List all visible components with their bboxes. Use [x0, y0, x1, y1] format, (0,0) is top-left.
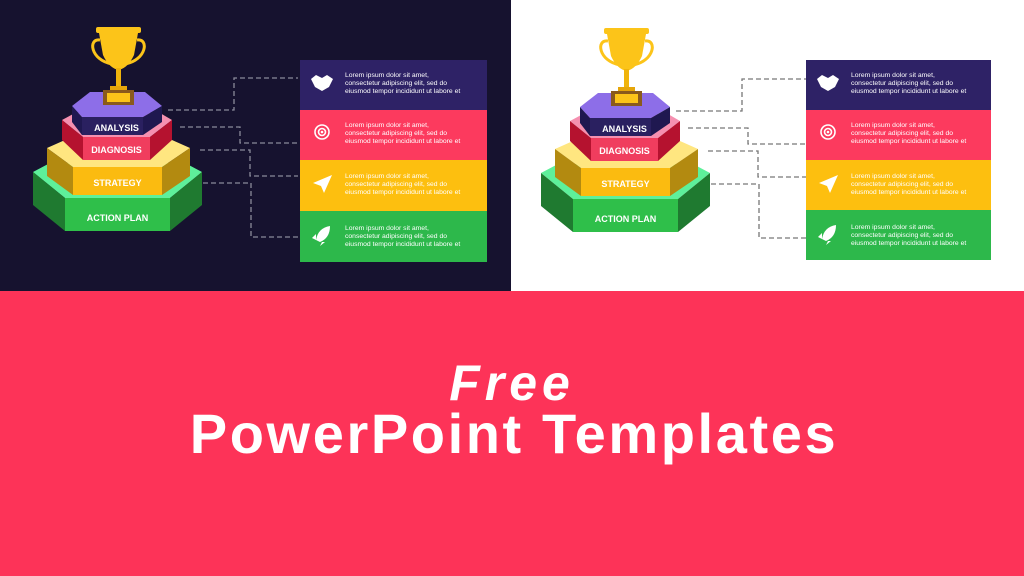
box: paper plane: Lorem ipsum dolor sit amet, — [345, 173, 429, 180]
pyramid: light: STRATEGY — [601, 179, 650, 189]
slide: dark version — [33, 27, 487, 262]
panel: info boxes light: Lorem ipsum dolor sit amet, — [851, 224, 935, 231]
connectors: dashed lines light — [676, 79, 806, 238]
tier: action plan: ACTION PLAN — [87, 213, 148, 223]
slide: light version — [541, 28, 991, 260]
panel: info boxes light: consectetur adipiscing elit, sed do — [851, 181, 953, 188]
pyramid: light — [541, 28, 710, 232]
panel: info boxes light: eiusmod tempor incididunt ut labore et — [851, 189, 966, 196]
tier: strategy — [47, 140, 190, 195]
panel: bottom banner — [0, 291, 1024, 576]
tier: analysis — [72, 92, 162, 135]
connectors: dashed lines — [168, 78, 298, 237]
heading: PowerPoint Templates: PowerPoint Templates — [190, 402, 838, 465]
box: handshake — [300, 60, 487, 110]
tier: diagnosis — [62, 113, 172, 160]
panel: white slide background — [511, 0, 1024, 291]
panel: info boxes light: consectetur adipiscing elit, sed do — [851, 232, 953, 239]
box: handshake: Lorem ipsum dolor sit amet, — [345, 72, 429, 79]
panel: info boxes light: Lorem ipsum dolor sit amet, — [851, 173, 935, 180]
box: paper plane — [300, 160, 487, 211]
tier: strategy: STRATEGY — [93, 178, 142, 188]
box: paper plane: consectetur adipiscing elit, sed do — [345, 181, 447, 188]
panel: info boxes light: eiusmod tempor incididunt ut labore et — [851, 138, 966, 145]
pyramid: dark — [33, 27, 202, 231]
box: rocket: eiusmod tempor incididunt ut labore et — [345, 241, 460, 248]
box: target — [300, 110, 487, 160]
heading: Free: Free — [449, 355, 575, 411]
panel: info boxes light: eiusmod tempor incididunt ut labore et — [851, 88, 966, 95]
box: target: Lorem ipsum dolor sit amet, — [345, 122, 429, 129]
box: rocket: consectetur adipiscing elit, sed do — [345, 233, 447, 240]
panel: info boxes light: consectetur adipiscing elit, sed do — [851, 80, 953, 87]
pyramid: light: DIAGNOSIS — [599, 146, 650, 156]
box: handshake: eiusmod tempor incididunt ut labore et — [345, 88, 460, 95]
tier: diagnosis: DIAGNOSIS — [91, 145, 142, 155]
box: paper plane: eiusmod tempor incididunt ut labore et — [345, 189, 460, 196]
box: target: eiusmod tempor incididunt ut labore et — [345, 138, 460, 145]
panel: info boxes light: consectetur adipiscing elit, sed do — [851, 130, 953, 137]
pyramid: light: ANALYSIS — [602, 124, 647, 134]
panel: info boxes light: Lorem ipsum dolor sit amet, — [851, 122, 935, 129]
box: target: consectetur adipiscing elit, sed do — [345, 130, 447, 137]
box: handshake: consectetur adipiscing elit, sed do — [345, 80, 447, 87]
tier: action plan — [33, 163, 202, 231]
panel: dark slide background — [0, 0, 511, 291]
panel: info boxes light: eiusmod tempor incididunt ut labore et — [851, 240, 966, 247]
panel: info boxes — [300, 60, 487, 262]
panel: info boxes light: Lorem ipsum dolor sit amet, — [851, 72, 935, 79]
box: rocket — [300, 211, 487, 262]
tier: analysis: ANALYSIS — [94, 123, 139, 133]
pyramid: light: ACTION PLAN — [595, 214, 656, 224]
box: rocket: Lorem ipsum dolor sit amet, — [345, 225, 429, 232]
panel: info boxes light — [806, 60, 991, 260]
icon: trophy — [93, 27, 144, 105]
